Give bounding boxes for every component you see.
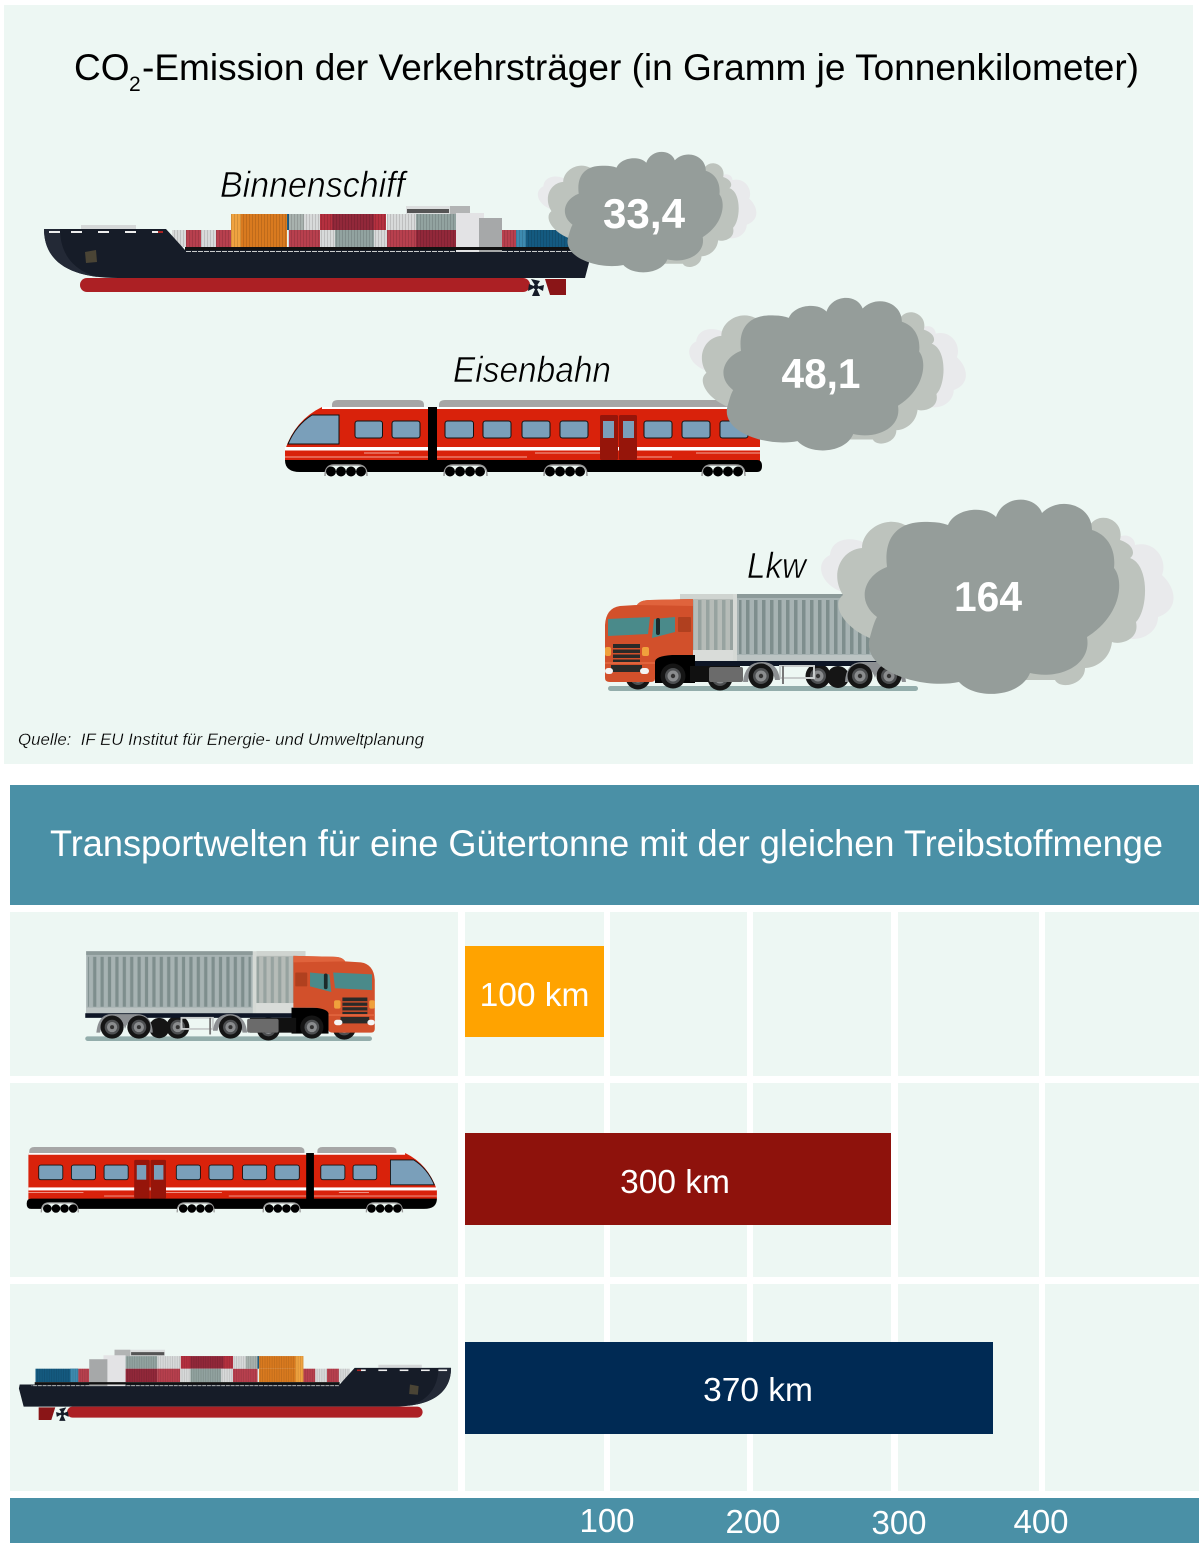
cloud: 48,1 bbox=[689, 298, 966, 450]
axis bar: 100 bbox=[579, 1502, 635, 1539]
cloud: 33,4: 33,4 bbox=[603, 190, 686, 237]
cloud: 48,1: 48,1 bbox=[782, 350, 860, 397]
icon: truck (chart row) bbox=[85, 951, 375, 1041]
icon: truck bbox=[605, 594, 918, 691]
title: 2 bbox=[129, 73, 141, 96]
label: Lkw: Lkw bbox=[747, 545, 808, 586]
axis bar: 200 bbox=[725, 1503, 781, 1540]
header banner: Transportwelten für eine Gütertonne mit der gleichen Treibstoffmenge bbox=[50, 823, 1163, 864]
label: Binnenschiff: Binnenschiff bbox=[220, 164, 409, 205]
source note: Quelle: IF EU Institut für Energie- und Umweltplanung bbox=[18, 730, 425, 749]
axis bar: 400 bbox=[1013, 1503, 1069, 1540]
axis bar bbox=[10, 1498, 1199, 1543]
panel: CO2 emissions bbox=[4, 5, 1193, 764]
label: Eisenbahn: Eisenbahn bbox=[453, 349, 611, 390]
cloud: 33,4 bbox=[538, 152, 756, 272]
cloud: 164: 164 bbox=[954, 573, 1023, 620]
title: CO bbox=[74, 47, 130, 88]
bar: truck 100 km bbox=[465, 946, 604, 1037]
cloud: 164 bbox=[821, 500, 1174, 694]
bar: train 300 km bbox=[465, 1133, 891, 1225]
icon: container ship bbox=[44, 206, 591, 296]
bar: ship 370 km bbox=[465, 1342, 993, 1434]
icon: ship (chart row) bbox=[19, 1350, 451, 1421]
icon: train (chart row) bbox=[27, 1147, 437, 1213]
header banner bbox=[10, 785, 1199, 905]
chart: transport distance grid bbox=[10, 912, 1199, 1491]
bar: ship 370 km: 370 km bbox=[703, 1372, 813, 1409]
bar: truck 100 km: 100 km bbox=[480, 977, 589, 1014]
bar: train 300 km: 300 km bbox=[620, 1164, 730, 1201]
icon: train bbox=[285, 400, 762, 476]
title: -Emission der Verkehrsträger (in Gramm je Tonnenkilometer) bbox=[142, 47, 1139, 88]
axis bar: 300 bbox=[871, 1504, 927, 1541]
